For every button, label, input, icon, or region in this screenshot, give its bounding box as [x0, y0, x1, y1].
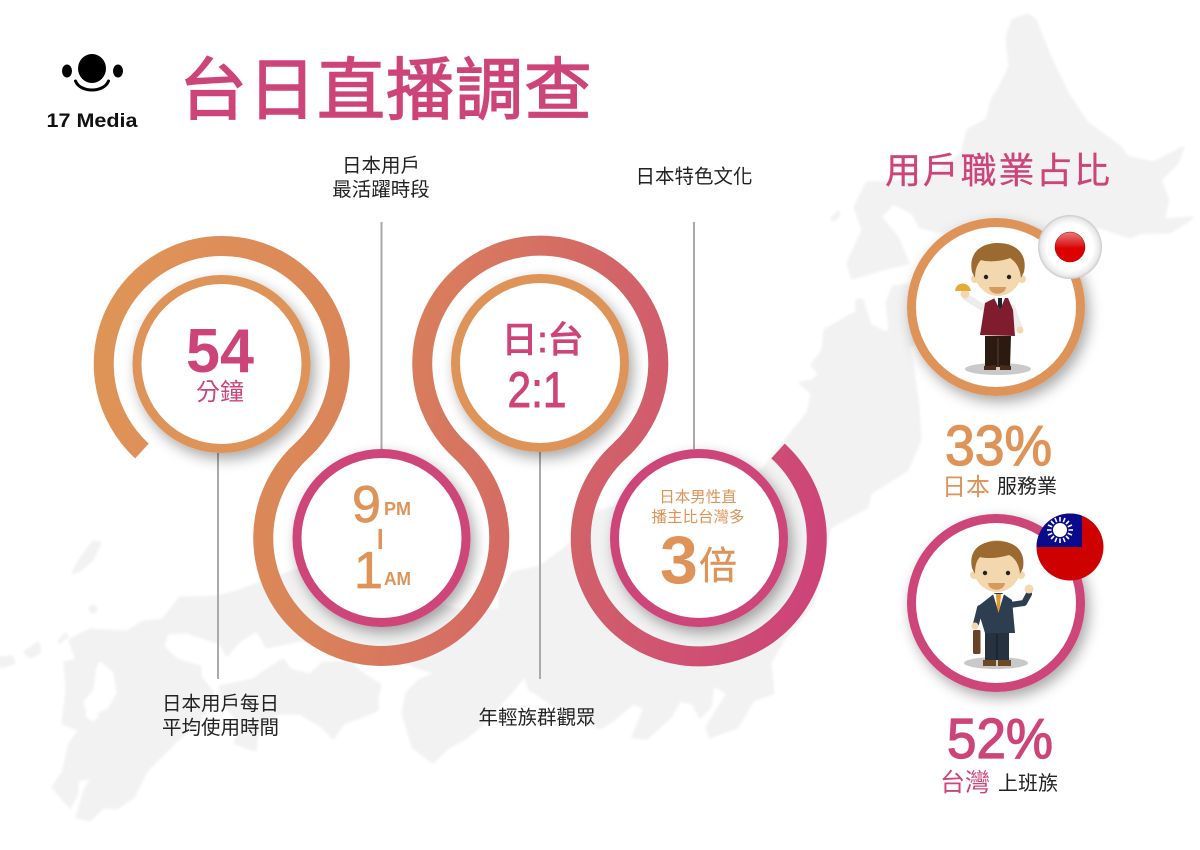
label: average daily usage time: 平均使用時間: [162, 717, 279, 739]
title: 台日直播調查: [179, 53, 593, 129]
circle: male streamers 3x: 3: [660, 522, 698, 598]
icon: waiter character: [955, 243, 1031, 375]
circle: male streamers 3x: 播主比台灣多: [651, 508, 745, 526]
heading: occupation share: 用戶職業占比: [885, 150, 1112, 191]
connector line 3: [539, 452, 541, 679]
label: most active hours: 日本用戶: [342, 155, 420, 177]
circle: Japan to Taiwan 2:1: 日:台: [501, 319, 584, 360]
logo: 17 Media: [46, 54, 138, 132]
circle: 54 minutes: [137, 280, 306, 448]
label: Japanese culture: 日本特色文化: [635, 166, 753, 188]
panel: Taiwan occupation: [912, 513, 1104, 688]
circle: 9PM to 1AM: [297, 454, 466, 622]
circle: Japan to Taiwan 2:1: [456, 278, 624, 448]
circle: 9PM to 1AM: AM: [384, 569, 411, 589]
stat: Taiwan 52%: 台灣: [940, 769, 990, 797]
stat: Japan 33%: 日本: [942, 474, 990, 501]
logo: 17 Media: 17 Media: [46, 111, 138, 132]
circle: 9PM to 1AM: PM: [384, 499, 411, 519]
label: most active hours: [332, 155, 430, 201]
circle: 9PM to 1AM: 1: [354, 542, 383, 600]
label: average daily usage time: [162, 693, 279, 739]
label: average daily usage time: 日本用戶每日: [162, 693, 279, 715]
circle: 54 minutes: 分鐘: [196, 379, 244, 406]
circle: 9PM to 1AM: 9: [352, 476, 381, 534]
circle: Japan to Taiwan 2:1: 2:1: [508, 362, 566, 418]
icon: Japan flag: [1038, 215, 1102, 279]
circle: male streamers 3x: [614, 454, 784, 622]
stat: Japan 33%: 服務業: [997, 475, 1057, 498]
stat: Japan 33%: 33%: [945, 414, 1052, 478]
connector line 4: [693, 222, 695, 449]
icon: office worker character: [964, 540, 1034, 669]
stat: Taiwan 52%: 52%: [947, 707, 1053, 771]
circle: 54 minutes: 54: [186, 317, 255, 386]
stat: Taiwan 52%: [940, 707, 1058, 797]
label: young audience: 年輕族群觀眾: [478, 707, 596, 729]
connector line 1: [217, 453, 219, 679]
ribbon connecting the four circles: [104, 246, 817, 656]
circle: male streamers 3x: 日本男性直: [659, 488, 737, 506]
panel: Japan occupation: [912, 215, 1102, 392]
icon: Taiwan flag: [1036, 513, 1104, 581]
stat: Taiwan 52%: 上班族: [998, 772, 1058, 795]
circle: male streamers 3x: 倍: [699, 546, 737, 588]
label: most active hours: 最活躍時段: [332, 179, 430, 201]
connector line 2: [380, 222, 382, 449]
